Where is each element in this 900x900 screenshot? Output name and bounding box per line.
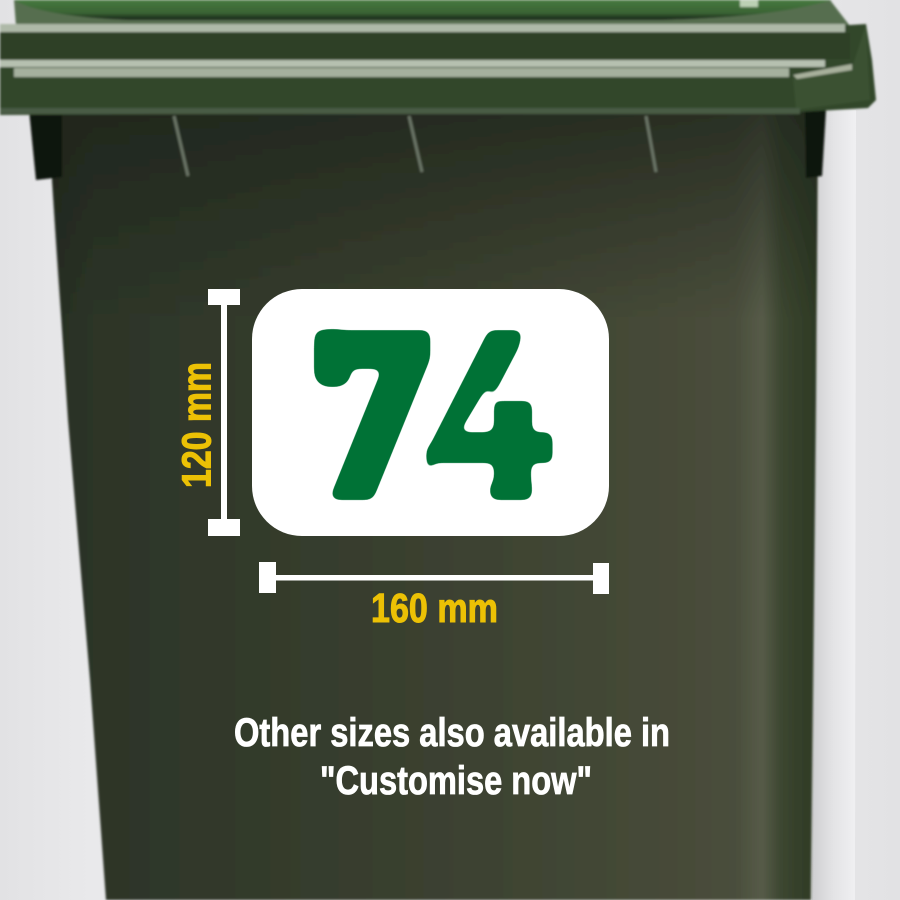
sticker number <box>314 328 553 500</box>
bin body <box>52 110 818 900</box>
height label: 120 mm <box>174 362 220 488</box>
note: Other sizes also available in <box>234 711 670 755</box>
sticker number: 4 <box>421 291 558 549</box>
bin hinge tabs <box>29 110 826 180</box>
sticker number: 7 <box>305 290 442 549</box>
width dimension bar <box>259 562 609 594</box>
sticker <box>252 289 609 549</box>
note <box>234 711 670 803</box>
bin lid <box>14 0 850 26</box>
bin shadow strip <box>812 110 856 900</box>
note: "Customise now" <box>320 759 592 803</box>
width label: 160 mm <box>371 585 498 631</box>
bin ribs <box>174 116 656 176</box>
sticker panel <box>252 289 609 536</box>
height dimension bar <box>208 289 240 536</box>
bin rim <box>0 24 876 115</box>
